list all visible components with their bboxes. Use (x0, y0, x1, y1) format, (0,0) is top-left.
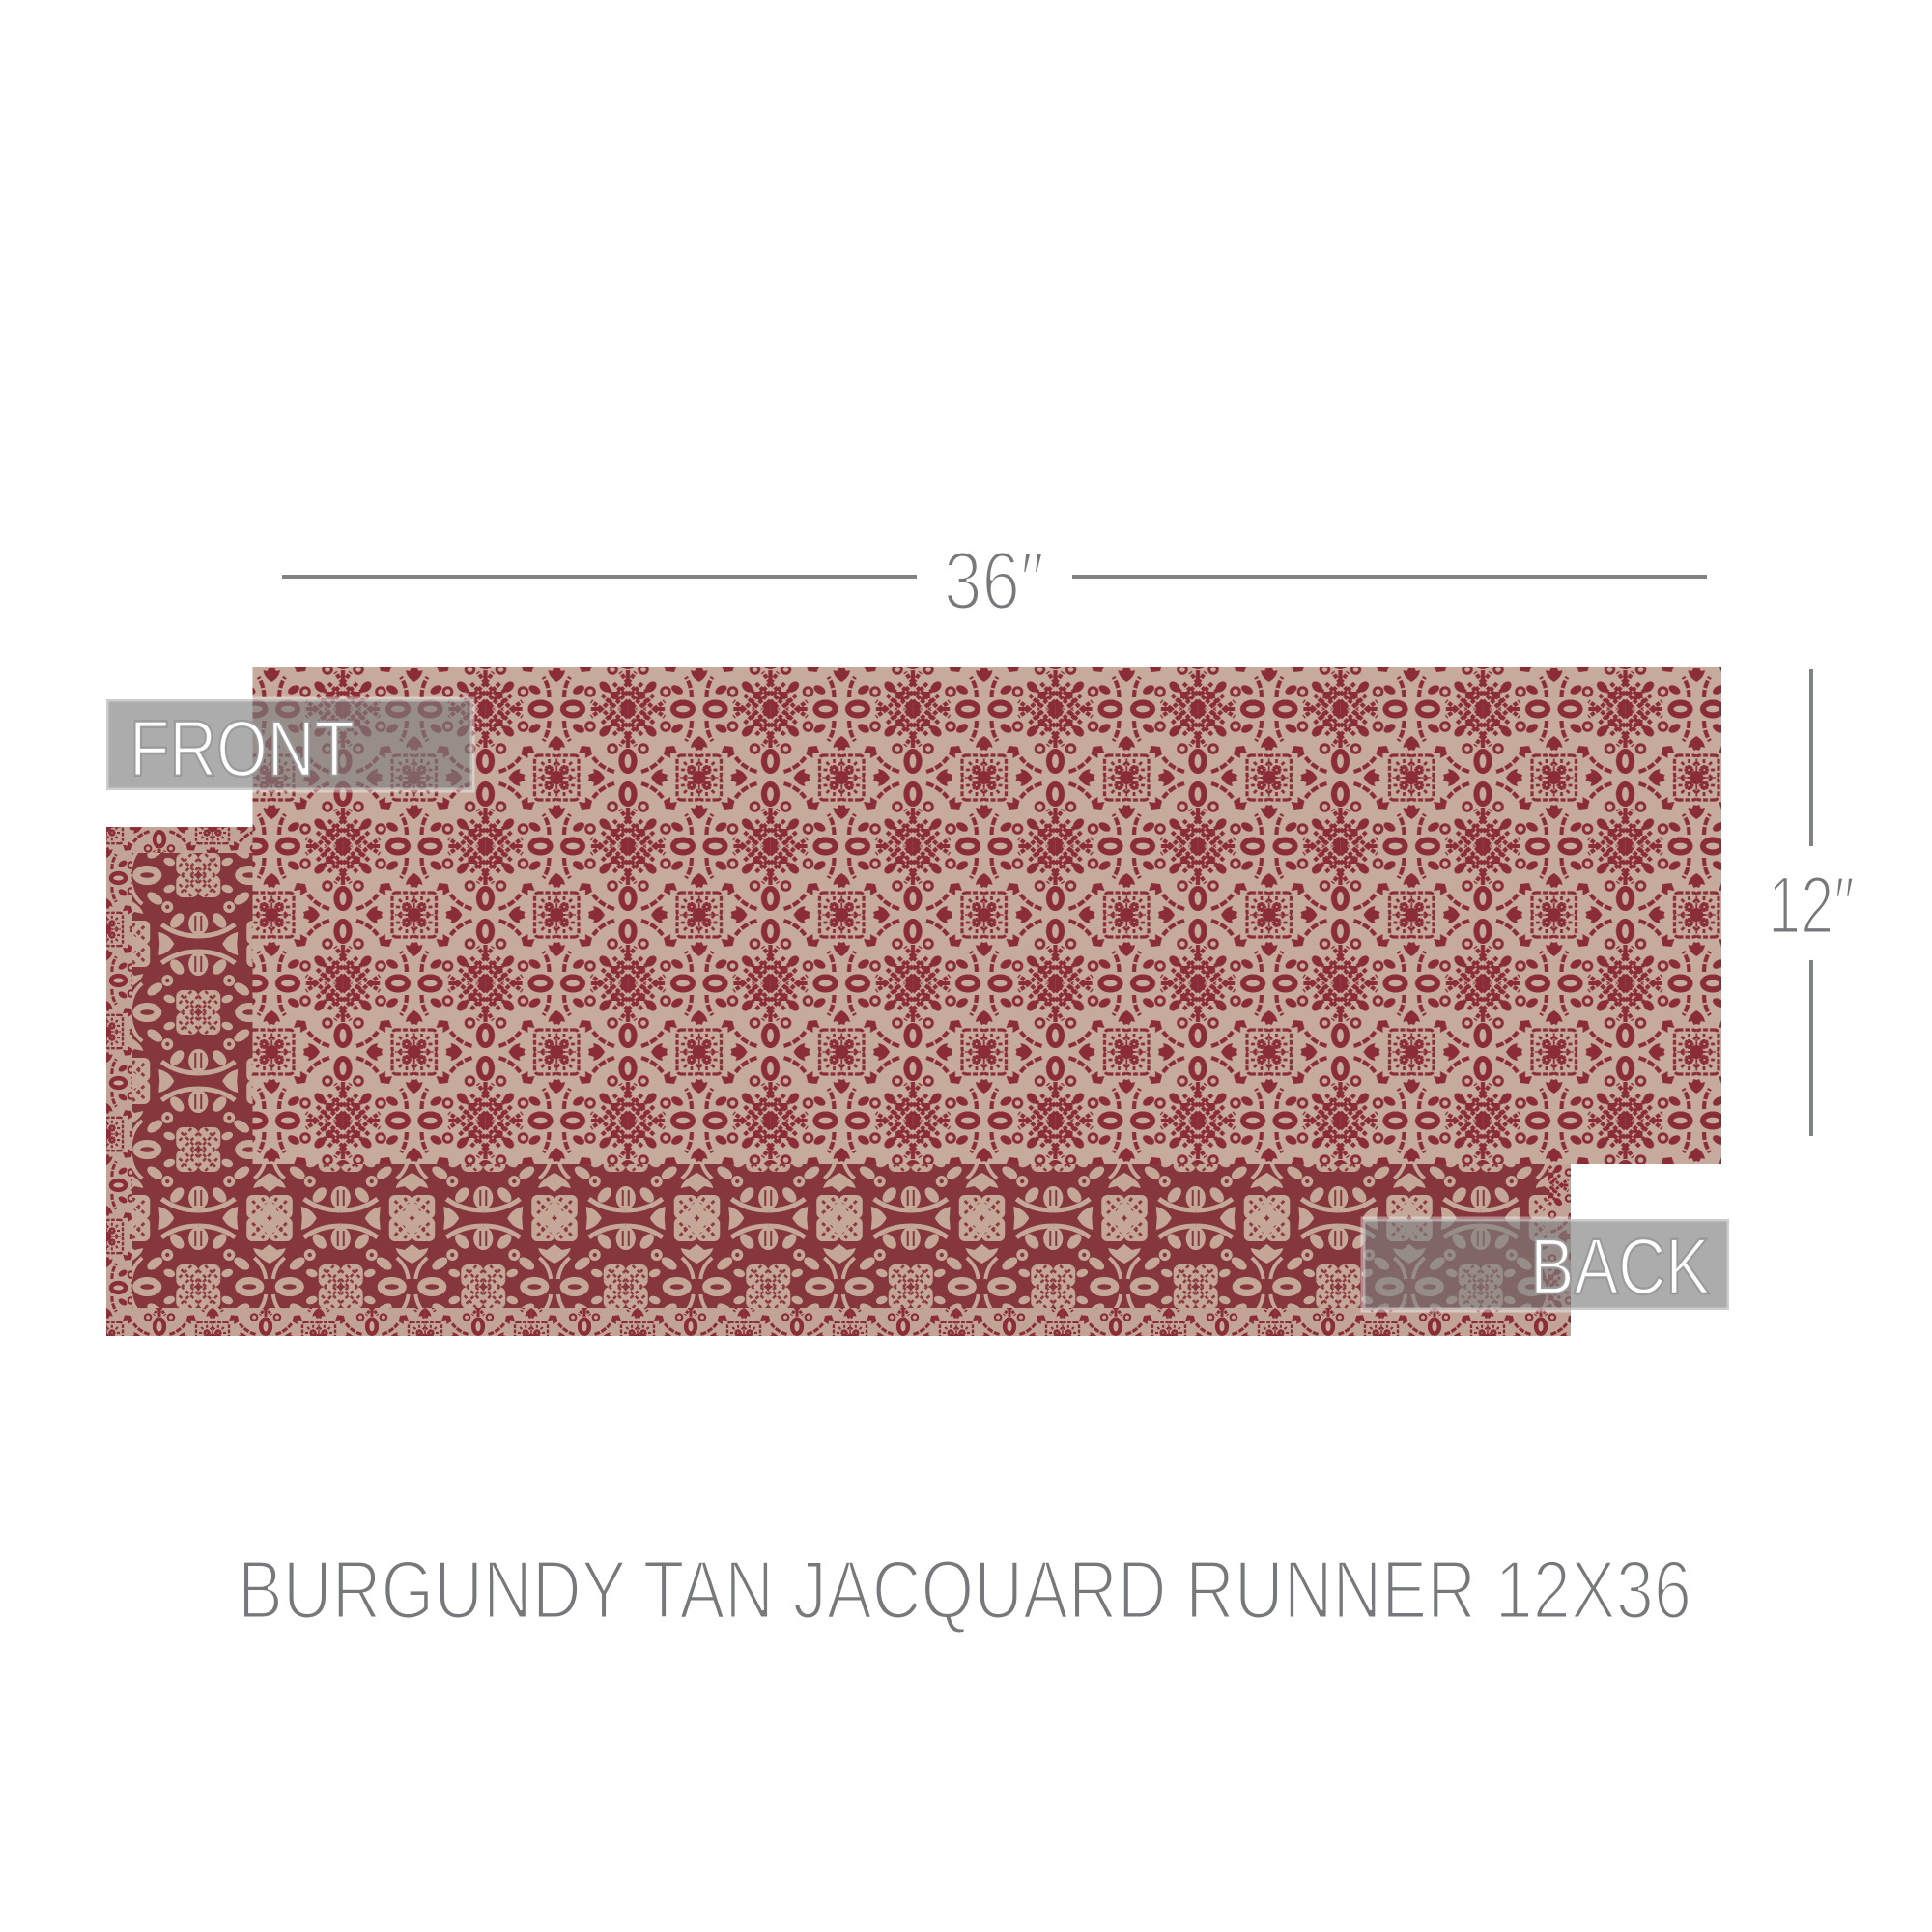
width dimension: 36 inches (282, 535, 1707, 626)
back hem border (106, 827, 1571, 1336)
width dimension: 36 inches: 36″ (944, 535, 1044, 626)
label: BACK (1363, 1219, 1729, 1311)
back of runner fabric (106, 827, 1571, 1336)
front of runner fabric (253, 667, 1721, 1164)
label: BACK: BACK (1530, 1223, 1710, 1311)
height dimension: 12 inches (1768, 669, 1855, 1136)
height dimension: 12 inches: 12″ (1768, 860, 1855, 951)
label: FRONT: FRONT (129, 705, 355, 793)
label: FRONT (106, 699, 472, 793)
